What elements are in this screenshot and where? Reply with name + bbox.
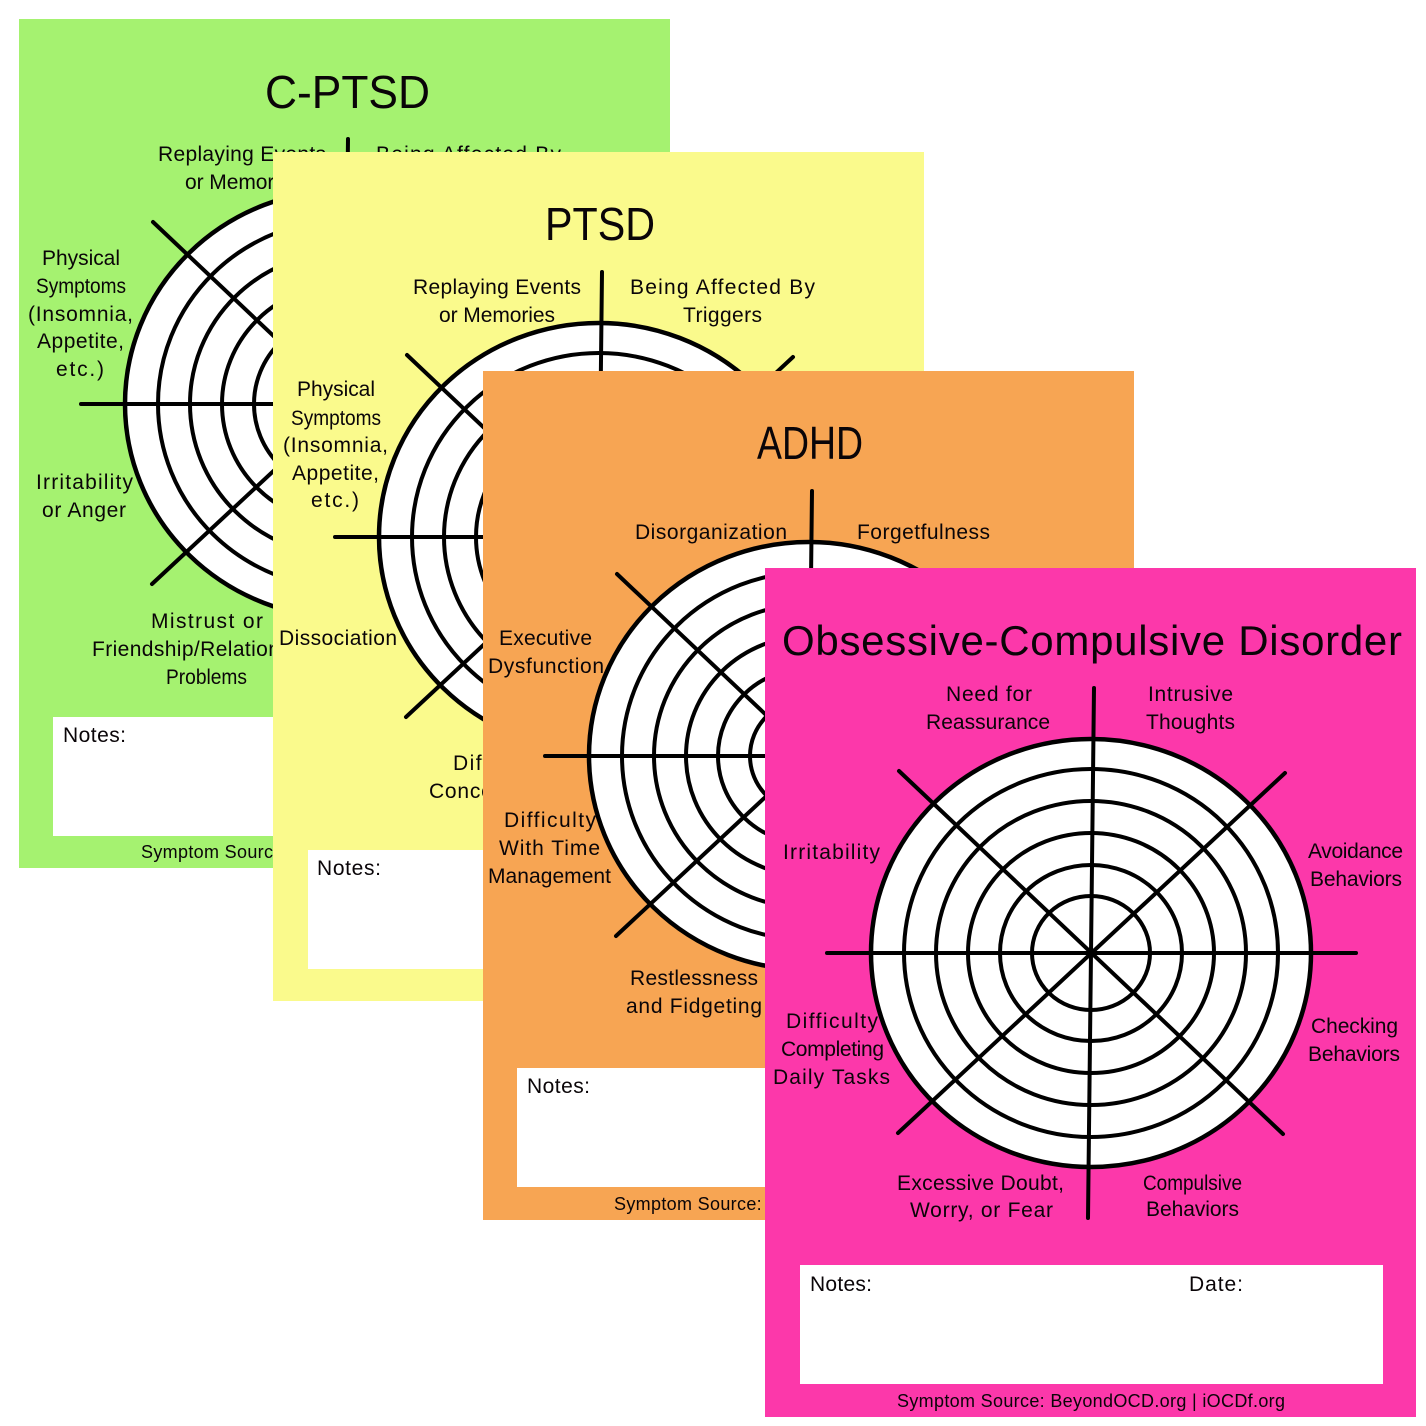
label: Mistrust or Friendship/Relationship Problems: Mistrust or bbox=[151, 610, 263, 633]
label: Physical Symptoms bbox=[28, 247, 133, 381]
label: Restlessness and Fidgeting: Restlessness bbox=[630, 967, 758, 990]
notes box: ADHD: Notes: bbox=[527, 1075, 590, 1098]
label: Dissociation: Dissociation bbox=[279, 627, 397, 650]
label: Being Affected By Triggers bbox=[630, 276, 816, 327]
title: Obsessive-Compulsive Disorder: Obsessive-Compulsive Disorder bbox=[782, 617, 1402, 664]
label: Replaying Events or Memories bbox=[413, 276, 581, 327]
label: Physical Symptoms: Appetite, bbox=[37, 330, 124, 353]
label: Excessive Doubt, Worry, or Fear: Excessive Doubt, bbox=[897, 1172, 1064, 1195]
label: Disorganization: Disorganization bbox=[635, 521, 787, 544]
label: Physical Symptoms bbox=[283, 378, 388, 512]
label: Difficulty Concentrating bbox=[429, 752, 569, 803]
label: Physical Symptoms: Physical bbox=[297, 378, 375, 401]
title: PTSD: PTSD bbox=[545, 198, 655, 250]
label: Physical Symptoms: Appetite, bbox=[292, 462, 379, 485]
notes box: PTSD: Notes: bbox=[317, 857, 381, 880]
notes box: PTSD bbox=[308, 850, 891, 969]
label: Replaying Events or Memories: or Memories bbox=[439, 304, 555, 327]
label: Need for Reassurance bbox=[926, 683, 1050, 734]
label: Difficulty Concentrating: Concentrating bbox=[429, 780, 569, 803]
panel: Obsessive-Compulsive Disorder worksheet bbox=[765, 568, 1416, 1417]
source line: ADHD: Symptom Source: BeyondOCD.org | iOCDf.org bbox=[614, 1194, 1002, 1214]
label: Difficulty Completing Daily Tasks bbox=[773, 1010, 890, 1089]
label: Restlessness and Fidgeting bbox=[626, 967, 762, 1018]
notes box: OCD bbox=[800, 1265, 1383, 1384]
label: Replaying Events or Memories: Replaying Events bbox=[413, 276, 581, 299]
label: Difficulty With Time Management bbox=[488, 809, 611, 888]
panel: C-PTSD worksheet bbox=[19, 19, 670, 868]
label: Difficulty With Time Management: Management bbox=[488, 865, 611, 888]
notes box: C-PTSD bbox=[53, 717, 636, 836]
label: Difficulty With Time Management: Difficulty bbox=[504, 809, 596, 832]
label: Difficulty Completing Daily Tasks: Difficulty bbox=[786, 1010, 878, 1033]
panel: PTSD worksheet bbox=[273, 152, 924, 1001]
label: Forgetfulness: Forgetfulness bbox=[857, 521, 990, 544]
source line: OCD: Symptom Source: BeyondOCD.org | iOCDf.org bbox=[897, 1391, 1285, 1411]
label: Compulsive Behaviors bbox=[1143, 1172, 1242, 1221]
label: Avoidance Behaviors: Avoidance bbox=[1308, 840, 1403, 863]
label: Physical Symptoms: (Insomnia, bbox=[283, 434, 388, 457]
label: Physical Symptoms: Symptoms bbox=[291, 407, 381, 430]
label: Compulsive Behaviors: Behaviors bbox=[1146, 1198, 1239, 1221]
notes box: OCD: Date: bbox=[1189, 1273, 1243, 1296]
notes box: OCD: Notes: bbox=[810, 1273, 872, 1296]
label: Physical Symptoms: etc.) bbox=[311, 489, 359, 512]
wheel chart: PTSD bbox=[335, 272, 864, 802]
label: Physical Symptoms: Physical bbox=[42, 247, 120, 270]
wheel chart: ADHD bbox=[545, 491, 1074, 1021]
label: Being Affected By: Being Affected By bbox=[376, 143, 562, 166]
label: Need for Reassurance: Need for bbox=[946, 683, 1032, 706]
title: ADHD: ADHD bbox=[757, 417, 863, 469]
label: Mistrust or Friendship/Relationship Problems bbox=[92, 610, 320, 689]
wheel chart: C-PTSD bbox=[81, 139, 610, 669]
label: Intrusive Thoughts: Thoughts bbox=[1146, 711, 1235, 734]
label: Mistrust or Friendship/Relationship Problems: Problems bbox=[166, 666, 247, 689]
label: Executive Dysfunction: Dysfunction bbox=[488, 655, 604, 678]
label: Difficulty Concentrating: Difficulty bbox=[453, 752, 546, 775]
label: Executive Dysfunction bbox=[488, 627, 604, 678]
label: Avoidance Behaviors bbox=[1308, 840, 1403, 891]
label: Checking Behaviors bbox=[1308, 1015, 1400, 1066]
label: Avoidance Behaviors: Behaviors bbox=[1310, 868, 1402, 891]
label: Replaying Events or Memories bbox=[158, 143, 326, 194]
label: Irritability or Anger bbox=[36, 471, 134, 522]
label: Need for Reassurance: Reassurance bbox=[926, 711, 1050, 734]
label: Being Affected By Triggers: Triggers bbox=[683, 304, 762, 327]
label: Difficulty With Time Management: With Time bbox=[499, 837, 600, 860]
label: Physical Symptoms: etc.) bbox=[56, 358, 104, 381]
label: Physical Symptoms: Symptoms bbox=[36, 275, 126, 298]
source line: C-PTSD: Symptom Source: BeyondOCD.org | iOCDf.org bbox=[141, 842, 529, 862]
label: Irritability or Anger: or Anger bbox=[42, 499, 126, 522]
panel: ADHD worksheet bbox=[483, 371, 1134, 1220]
label: Executive Dysfunction: Executive bbox=[499, 627, 592, 650]
label: Checking Behaviors: Behaviors bbox=[1308, 1043, 1400, 1066]
label: Difficulty Completing Daily Tasks: Completing bbox=[781, 1038, 884, 1061]
label: Checking Behaviors: Checking bbox=[1311, 1015, 1398, 1038]
label: Irritability: Irritability bbox=[783, 841, 880, 864]
label: Intrusive Thoughts: Intrusive bbox=[1148, 683, 1233, 706]
label: Being Affected By Triggers: Being Affected By bbox=[630, 276, 816, 299]
label: Physical Symptoms: (Insomnia, bbox=[28, 303, 133, 326]
label: Difficulty Completing Daily Tasks: Daily Tasks bbox=[773, 1066, 890, 1089]
label: Irritability or Anger: Irritability bbox=[36, 471, 134, 494]
title: C-PTSD: C-PTSD bbox=[265, 66, 430, 118]
wheel chart: OCD bbox=[827, 688, 1356, 1218]
label: Replaying Events or Memories: Replaying Events bbox=[158, 143, 326, 166]
label: Compulsive Behaviors: Compulsive bbox=[1143, 1172, 1242, 1195]
label: Restlessness and Fidgeting: and Fidgeting bbox=[626, 995, 762, 1018]
label: Intrusive Thoughts bbox=[1146, 683, 1235, 734]
label: Excessive Doubt, Worry, or Fear bbox=[897, 1172, 1064, 1222]
label: Mistrust or Friendship/Relationship Problems: Friendship/Relationship bbox=[92, 638, 320, 661]
label: Excessive Doubt, Worry, or Fear: Worry, or Fear bbox=[910, 1199, 1053, 1222]
notes box: C-PTSD: Notes: bbox=[63, 724, 126, 747]
notes box: ADHD bbox=[517, 1068, 1100, 1187]
label: Replaying Events or Memories: or Memories bbox=[185, 171, 301, 194]
